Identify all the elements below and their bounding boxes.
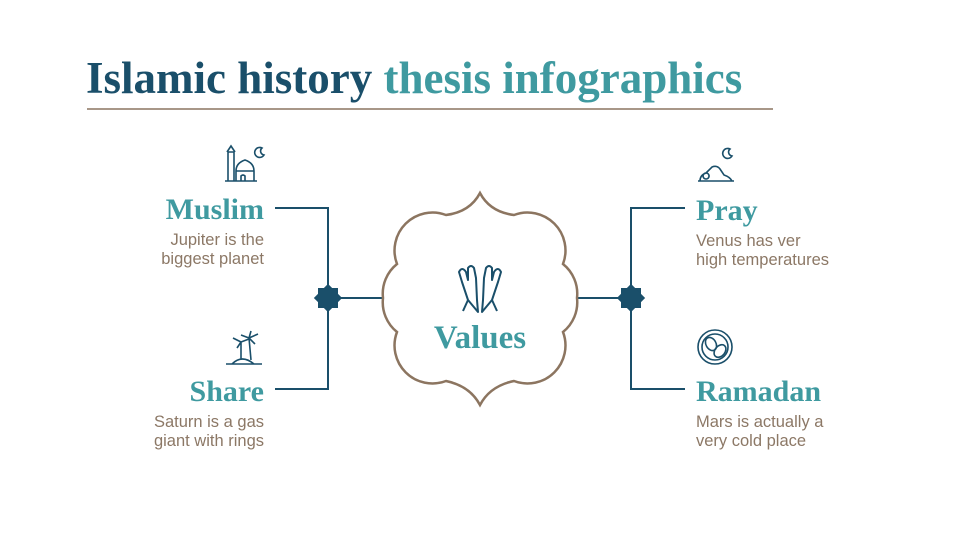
icon: prayer person bbox=[698, 148, 734, 181]
block: Pray bbox=[696, 194, 829, 269]
block: Share: Saturn is a gas bbox=[154, 413, 264, 431]
block: Muslim: Muslim bbox=[166, 193, 264, 226]
icon: mosque bbox=[225, 146, 264, 181]
block: Ramadan: Mars is actually a bbox=[696, 413, 823, 431]
icon: palm trees bbox=[226, 331, 262, 364]
right star bbox=[617, 284, 645, 312]
block: Ramadan: Ramadan bbox=[696, 375, 821, 408]
block: Pray: Venus has ver bbox=[696, 232, 801, 250]
block: Share: Share bbox=[190, 375, 264, 408]
icon: dates plate bbox=[698, 330, 732, 364]
block: Ramadan: very cold place bbox=[696, 432, 806, 450]
block: Muslim: Jupiter is the bbox=[170, 231, 264, 249]
block: Pray: high temperatures bbox=[696, 251, 829, 269]
block: Ramadan bbox=[696, 375, 824, 450]
values label: Values bbox=[434, 320, 526, 356]
title: Islamic history thesis infographics bbox=[86, 53, 742, 103]
block: Share bbox=[154, 375, 264, 450]
central scalloped frame bbox=[383, 193, 577, 405]
icon: praying hands bbox=[459, 266, 501, 312]
block: Share: giant with rings bbox=[154, 432, 264, 450]
right connector bbox=[577, 208, 685, 389]
block: Pray: Pray bbox=[696, 194, 758, 227]
block: Muslim bbox=[161, 193, 264, 268]
left connector bbox=[275, 208, 384, 389]
left star bbox=[314, 284, 342, 312]
block: Muslim: biggest planet bbox=[161, 250, 264, 268]
